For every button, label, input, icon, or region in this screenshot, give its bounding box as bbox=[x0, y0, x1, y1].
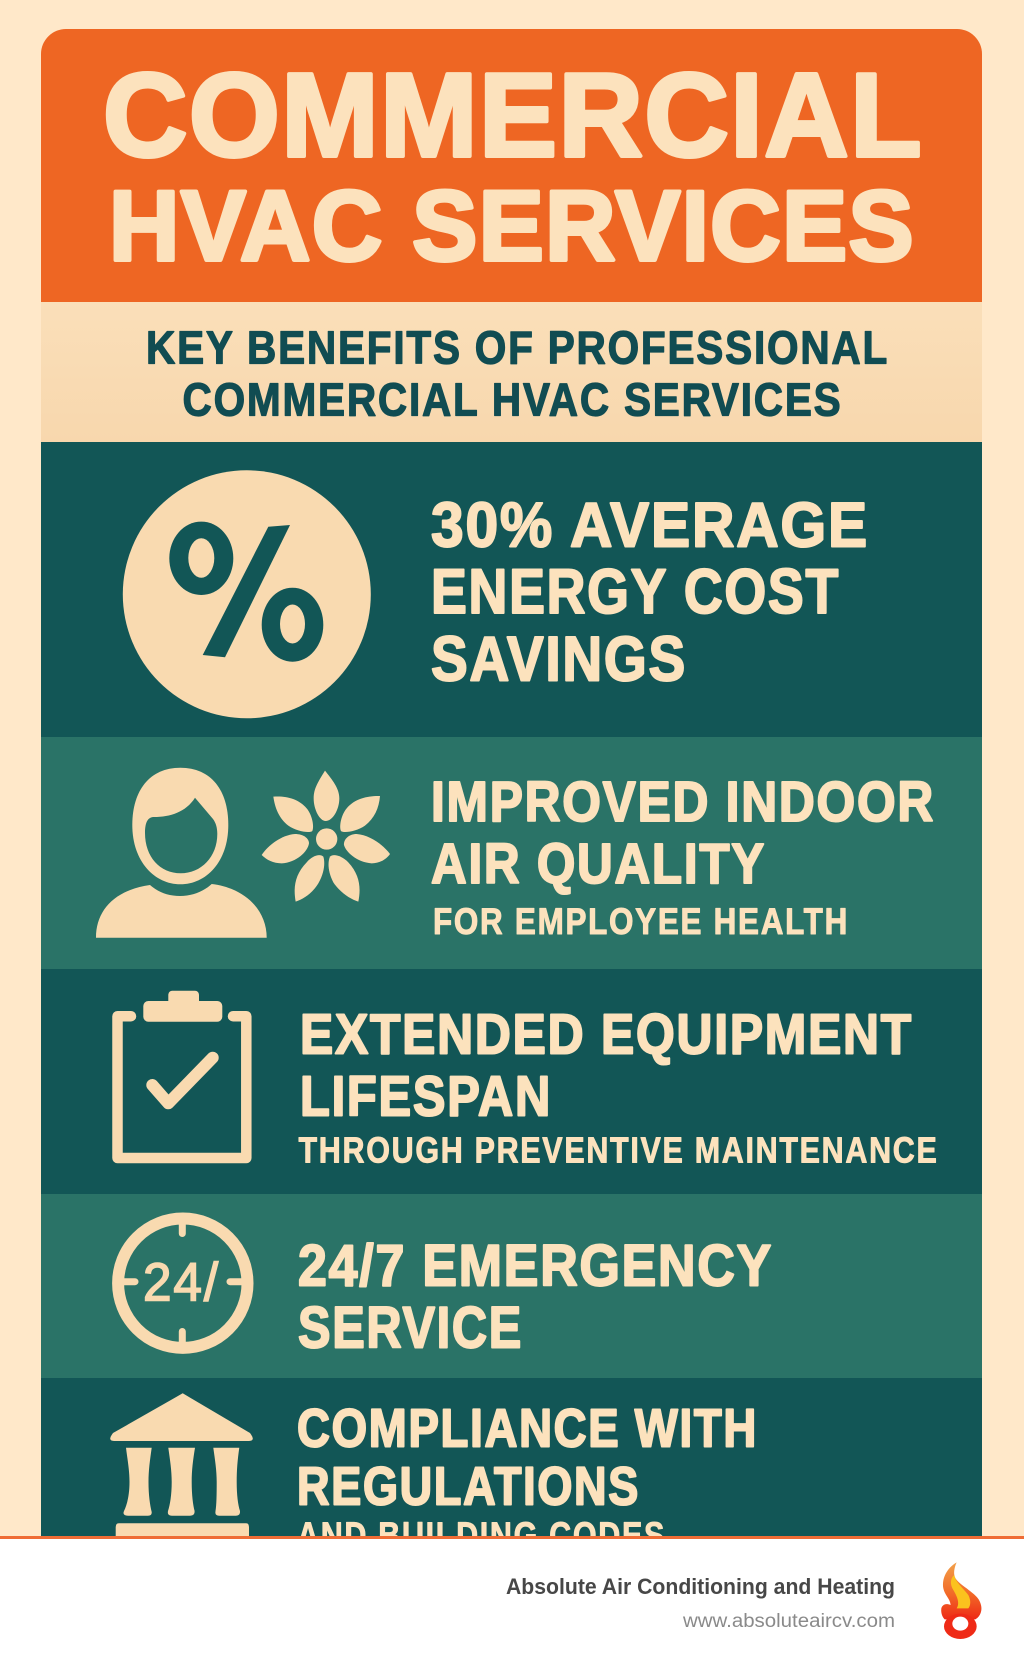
row 4 text: 24/7 EMERGENCY bbox=[298, 1234, 773, 1298]
icon: 24/7 clock bbox=[118, 1218, 248, 1348]
title line 2: HVAC SERVICES bbox=[109, 170, 915, 281]
row 1 text: 30% AVERAGE bbox=[431, 490, 869, 560]
icon: flame logo bbox=[941, 1562, 981, 1639]
row 3 text bbox=[298, 1002, 938, 1170]
row 5 text: REGULATIONS bbox=[297, 1456, 640, 1516]
subtitle line 1: KEY BENEFITS OF PROFESSIONAL bbox=[146, 322, 889, 374]
row 2 text bbox=[431, 770, 935, 942]
row 5 text bbox=[297, 1398, 758, 1556]
subtitle line 2: COMMERCIAL HVAC SERVICES bbox=[182, 374, 842, 426]
row 5: compliance bbox=[41, 1378, 982, 1556]
row 2 text: FOR EMPLOYEE HEALTH bbox=[433, 901, 849, 942]
row 4 text: SERVICE bbox=[298, 1296, 523, 1360]
icon: clipboard with check bbox=[118, 991, 246, 1158]
row 1 text: ENERGY COST bbox=[431, 557, 840, 627]
website: www.absoluteaircv.com bbox=[682, 1611, 895, 1632]
icon: person bbox=[96, 768, 267, 938]
row 3: equipment lifespan bbox=[41, 969, 982, 1194]
row 2: air quality bbox=[41, 737, 982, 969]
row 5 text: AND BUILDING CODES bbox=[297, 1515, 666, 1556]
row 3 text: LIFESPAN bbox=[300, 1064, 552, 1128]
row 1: energy savings bbox=[41, 442, 982, 737]
header panel: title bbox=[41, 29, 982, 302]
icon: government building bbox=[110, 1393, 253, 1540]
icon: 24/7 clock: 24/ bbox=[143, 1252, 220, 1312]
icon: percent circle bbox=[123, 470, 371, 718]
icon: flower bbox=[262, 771, 390, 902]
subtitle band bbox=[41, 302, 982, 442]
footer bbox=[0, 1536, 1024, 1666]
row 2 text: IMPROVED INDOOR bbox=[431, 770, 935, 834]
row 3 text: EXTENDED EQUIPMENT bbox=[300, 1002, 913, 1066]
row 5 text: COMPLIANCE WITH bbox=[297, 1398, 758, 1458]
company name: Absolute Air Conditioning and Heating bbox=[506, 1574, 895, 1599]
row 1 text bbox=[431, 490, 869, 694]
row 4 text bbox=[298, 1234, 773, 1360]
row 2 text: AIR QUALITY bbox=[431, 832, 766, 896]
row 4: emergency service bbox=[41, 1194, 982, 1378]
title line 1: COMMERCIAL bbox=[103, 49, 923, 182]
row 1 text: SAVINGS bbox=[431, 624, 687, 694]
